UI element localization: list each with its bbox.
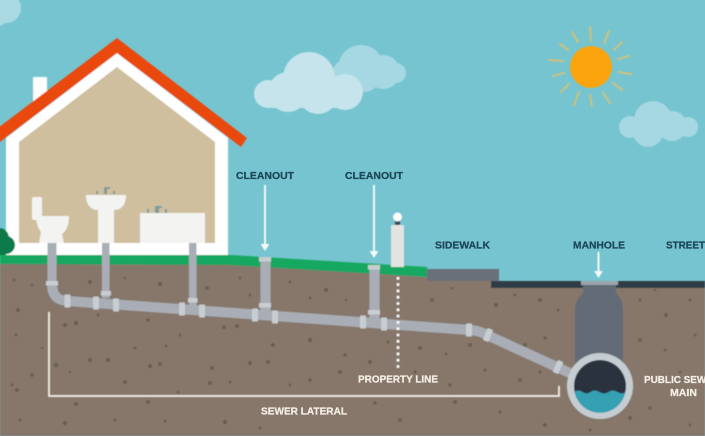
water in sewer main: [574, 390, 626, 413]
house: [0, 38, 247, 255]
cloud: rear: [333, 45, 406, 92]
icon: sink: [86, 187, 126, 243]
grass strip: [0, 255, 427, 277]
bush: [0, 228, 15, 255]
icon: toilet: [32, 197, 69, 243]
public sewer main cross-section: [567, 353, 633, 419]
label: property line: PROPERTY LINE: [358, 374, 438, 386]
street surface: [491, 281, 705, 288]
arrow: cleanout 2: [370, 185, 378, 258]
label: public sewer main: MAIN: [670, 387, 697, 399]
text labels: [236, 170, 705, 418]
sewer lateral pipe system: [46, 243, 572, 374]
label: public sewer main: [644, 374, 705, 399]
sidewalk slab: [427, 269, 499, 281]
manhole shaft: [575, 281, 623, 375]
sun rays: [549, 27, 631, 106]
house walls: [6, 53, 228, 255]
sun disc: [570, 46, 612, 88]
arrow: cleanout 1: [260, 185, 270, 251]
label: cleanout 2: CLEANOUT: [345, 170, 404, 182]
soil specks: [10, 277, 696, 432]
label: sewer lateral: SEWER LATERAL: [261, 406, 348, 418]
sewer lateral bracket: [49, 312, 559, 396]
cloud: top left corner: [0, 0, 21, 26]
interior wall: [19, 67, 215, 243]
arrow: manhole: [594, 252, 603, 278]
cloud: front: [254, 52, 363, 114]
icon: bathtub: [140, 206, 205, 243]
soil: [0, 264, 705, 436]
label: manhole: MANHOLE: [573, 240, 625, 252]
property marker post: [391, 212, 404, 267]
property line dotted: [397, 277, 399, 368]
main sloped pipe: [52, 284, 572, 374]
vertical drain pipes: [48, 243, 380, 320]
roof: [0, 38, 247, 150]
label: cleanout 1: CLEANOUT: [236, 170, 295, 182]
pipe collars: [46, 257, 563, 374]
icon: sun: [549, 27, 631, 106]
cloud: right: [619, 101, 698, 147]
chimney: [33, 77, 47, 107]
label: sidewalk: SIDEWALK: [435, 240, 490, 252]
